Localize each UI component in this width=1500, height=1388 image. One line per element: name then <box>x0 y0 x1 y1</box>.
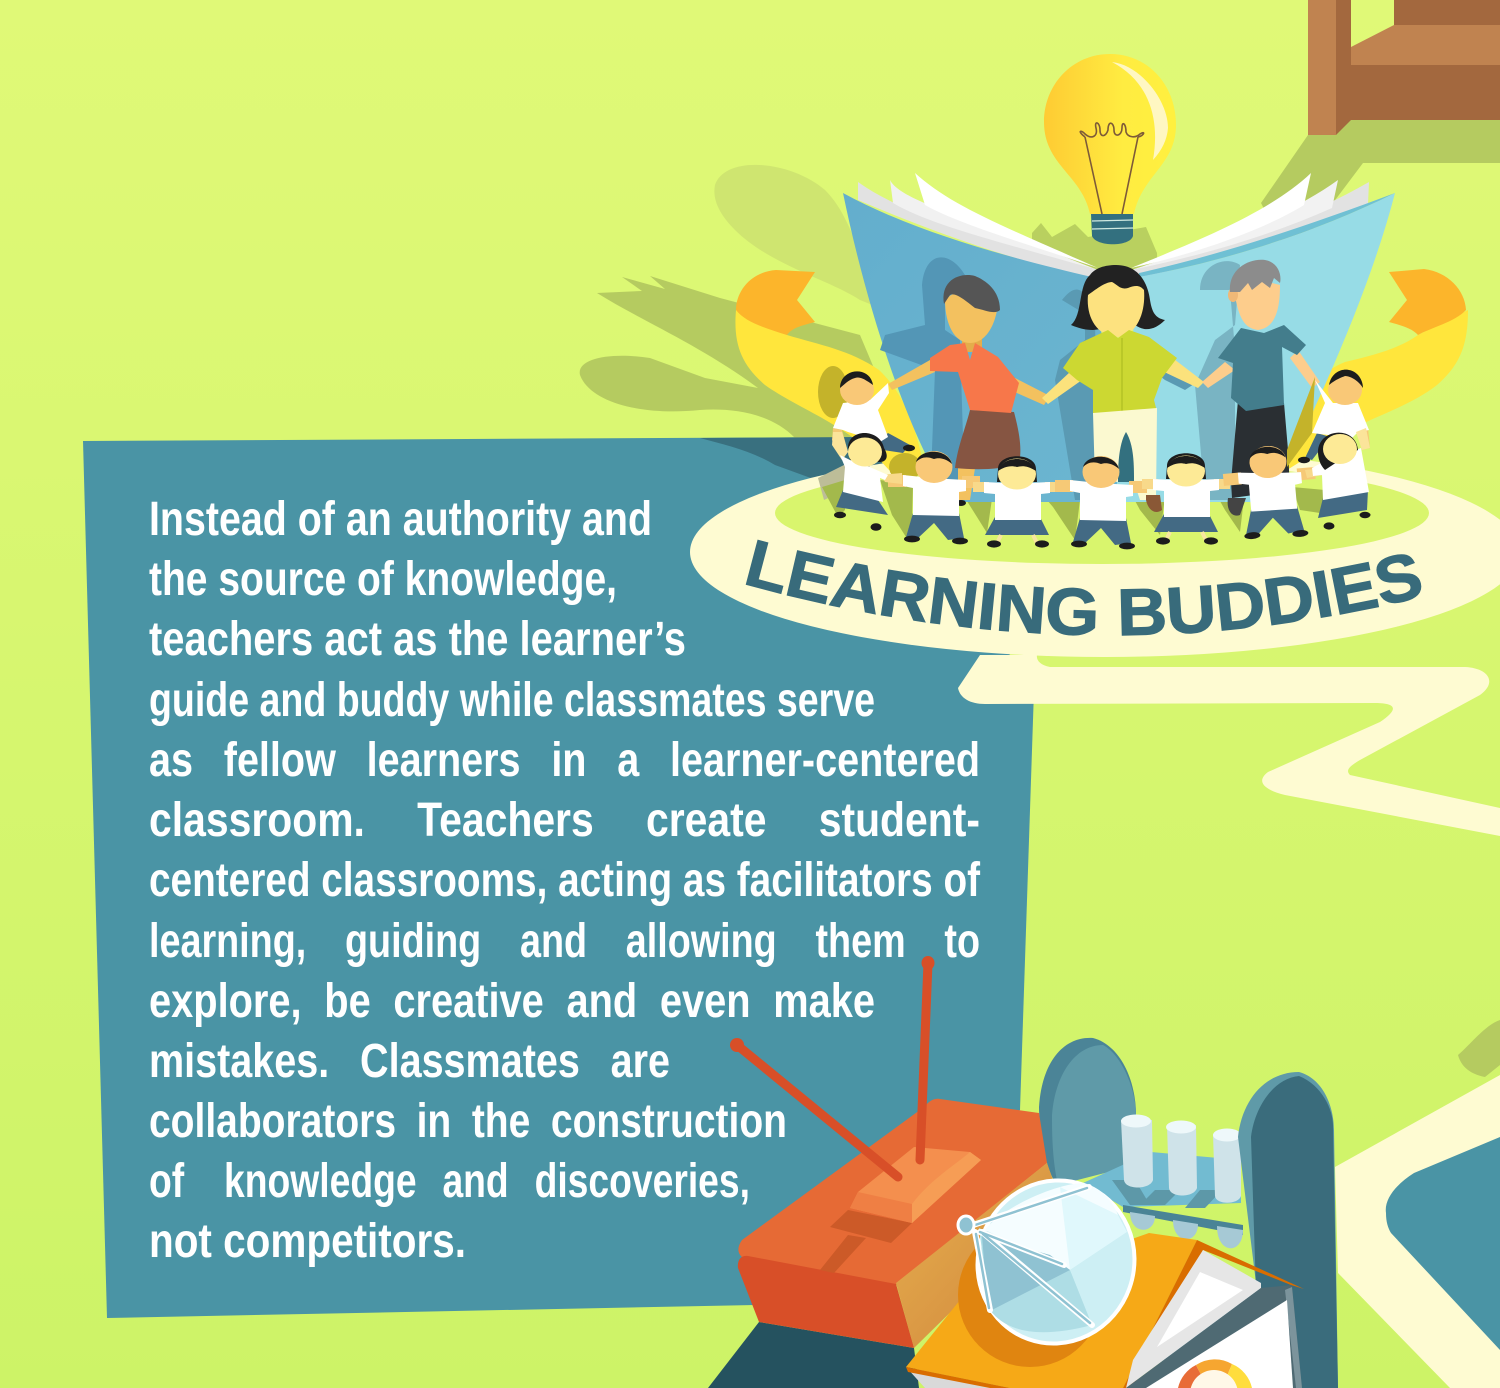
cover shadow strip <box>1139 193 1395 277</box>
child: right girl <box>1305 428 1370 530</box>
radio front <box>738 1256 914 1348</box>
body text: the source of knowledge, <box>149 553 617 606</box>
body text: collaborators in the construction <box>149 1095 787 1148</box>
body text: not competitors. <box>149 1215 466 1268</box>
child: boy 1 <box>888 451 980 544</box>
body text <box>149 493 981 1268</box>
book pages <box>858 173 1369 278</box>
rack tray stripes <box>1112 1180 1222 1208</box>
radio side <box>896 1163 1060 1348</box>
body text: mistakes. Classmates are <box>149 1035 670 1088</box>
shadow figures on book <box>880 257 1240 502</box>
shadow: behind bulb <box>1032 223 1158 290</box>
book <box>843 173 1395 502</box>
body text: centered classrooms, acting as facilitators of <box>149 854 981 907</box>
satellite dish <box>955 1158 1157 1366</box>
body text: Instead of an authority and <box>149 493 652 546</box>
radio base <box>708 1322 919 1388</box>
shadow on road <box>818 462 870 500</box>
radio <box>708 956 1060 1388</box>
body text: as fellow learners in a learner-centered <box>149 734 980 787</box>
tube bottoms <box>1130 1212 1243 1248</box>
furniture: top right <box>1308 0 1500 135</box>
stack of papers <box>906 1223 1304 1388</box>
antenna right <box>920 956 934 1160</box>
child: boy 2 <box>1055 456 1147 549</box>
rack left post <box>1039 1038 1136 1185</box>
radio knob shadow <box>820 1210 912 1273</box>
child: back right boy <box>1287 370 1370 467</box>
shadow: book and figures on ground <box>580 276 900 452</box>
donut chart <box>1178 1359 1252 1388</box>
radio top <box>738 1099 1047 1285</box>
antenna left <box>730 1038 898 1177</box>
child: girl 1 <box>973 456 1061 548</box>
body text: classroom. Teachers create student- <box>149 794 980 847</box>
child: boy 3 <box>1221 442 1321 543</box>
left cover <box>843 193 1130 502</box>
body text: guide and buddy while classmates serve <box>149 674 875 727</box>
light bulb <box>1044 54 1176 244</box>
shadow: figures on panel <box>700 437 905 485</box>
adult: woman left <box>888 275 1050 506</box>
path: cream oval road <box>690 447 1500 836</box>
children: front row <box>832 428 1370 549</box>
shadows of children on island <box>822 480 1325 540</box>
inner green island <box>775 462 1429 564</box>
adult: man <box>1202 260 1320 516</box>
orange sheet <box>906 1233 1197 1388</box>
dish shadow <box>958 1223 1102 1367</box>
rack right post <box>1130 1072 1338 1388</box>
road: bottom right <box>1335 1020 1500 1388</box>
adult: center woman <box>1042 265 1204 512</box>
paper sheet <box>1126 1250 1261 1388</box>
test tubes <box>1121 1114 1241 1203</box>
children: back row <box>818 366 1370 481</box>
body text: explore, be creative and even make <box>149 975 875 1028</box>
body text: teachers act as the learner’s <box>149 613 686 666</box>
right cover <box>1115 193 1395 502</box>
child: left girl <box>832 432 902 531</box>
ribbon: left <box>735 270 925 470</box>
child: back left boy <box>818 366 921 481</box>
shadow: furniture <box>1261 120 1500 260</box>
path: winding road <box>958 655 1500 836</box>
ribbon: right <box>1287 269 1468 470</box>
rack bar <box>1123 1205 1243 1235</box>
rack tray <box>1083 1152 1241 1207</box>
orange sheet dark edge <box>906 1240 1304 1388</box>
title: Learning Buddies: LEARNING BUDDIES <box>746 540 1422 636</box>
radio knob <box>850 1147 981 1223</box>
panel: text background <box>83 437 1034 1318</box>
lab rack <box>1039 1038 1338 1388</box>
shadow: light bulb <box>714 165 885 310</box>
body text: learning, guiding and allowing them to <box>149 915 980 968</box>
chart board <box>1126 1285 1302 1388</box>
body text: of knowledge and discoveries, <box>149 1155 750 1208</box>
child: girl 2 <box>1142 453 1230 545</box>
grey page <box>906 1367 1000 1388</box>
